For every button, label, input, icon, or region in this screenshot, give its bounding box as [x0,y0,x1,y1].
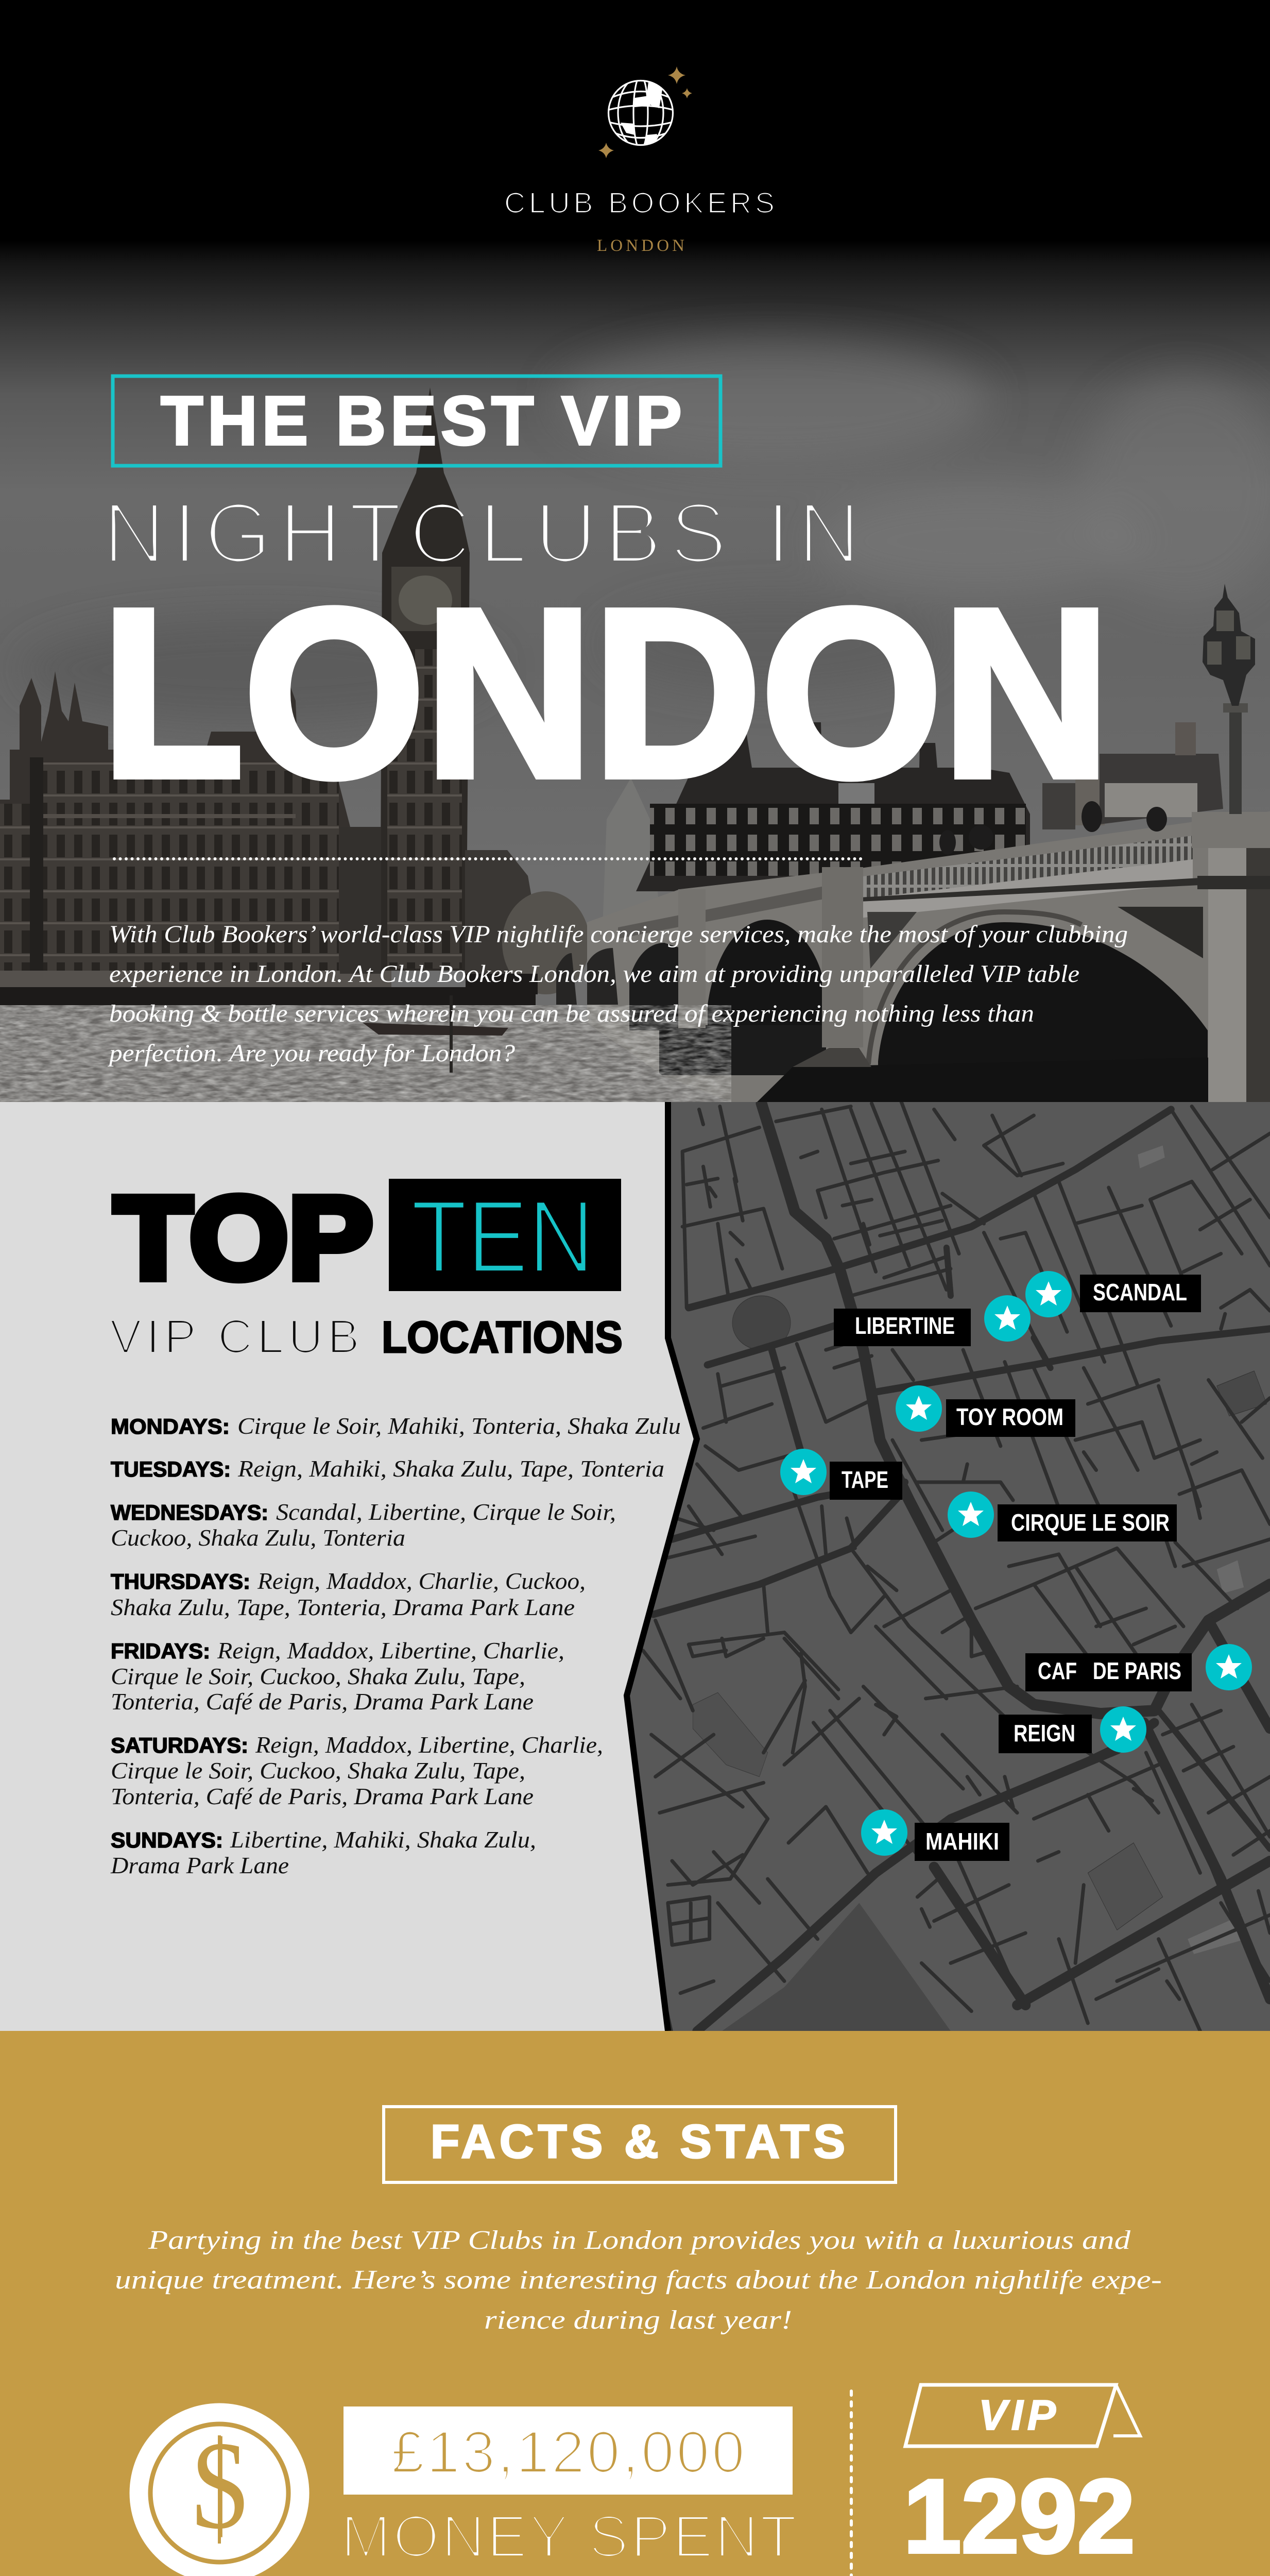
marker: Reign: REIGN [1014,1720,1075,1747]
schedule: Mondays: Cirque le Soir, Mahiki, Tonteria, Shaka Zulu [237,1413,681,1439]
schedule: Wednesdays [111,1499,616,1551]
schedule: Thursdays [111,1568,586,1620]
schedule: Thursdays: THURSDAYS: [111,1569,250,1594]
brand city: LONDON [597,236,684,255]
heading: TEN box: TEN [411,1179,594,1294]
schedule: Fridays: Reign, Maddox, Libertine, Charlie, [217,1637,564,1664]
intro paragraph: Partying in the best VIP Clubs in London provides you with a luxurious and [148,2226,1131,2255]
photo: Houses of Parliament [0,670,536,1006]
schedule: Fridays: Cirque le Soir, Cuckoo, Shaka Zulu, Tape, [111,1663,525,1689]
schedule: Saturdays: Cirque le Soir, Cuckoo, Shaka Zulu, Tape, [111,1757,525,1784]
panel: facts and stats [0,2031,1270,2576]
sky background [0,0,1270,1102]
intro paragraph: experience in London. At Club Bookers London, we aim at providing unparalleled VIP table [109,960,1079,988]
schedule: Saturdays [111,1732,603,1809]
panel: hero photo header [0,0,1270,1102]
marker: Reign [999,1706,1146,1753]
subheading: VIP club: VIP CLUB [110,1310,359,1363]
schedule: Tuesdays: TUESDAYS: [111,1457,231,1481]
schedule: Sundays: SUNDAYS: [111,1828,223,1852]
schedule: Wednesdays: Scandal, Libertine, Cirque le Soir, [276,1499,616,1525]
clouds [21,340,1270,721]
marker: Cafe de Paris [1025,1644,1252,1691]
intro paragraph: unique treatment. Here’s some interesting facts about the London nightlife expe- [115,2265,1162,2295]
map of central London [618,1100,1270,2035]
heading: nightclubs in: NIGHTCLUBS IN [103,485,860,581]
icon: gold sparkles [598,66,692,158]
teal frame [113,376,720,466]
marker: Tape [780,1449,902,1500]
marker: Toy Room [896,1385,1075,1437]
schedule: Saturdays: SATURDAYS: [111,1733,248,1757]
marker: Mahiki: MAHIKI [925,1828,999,1855]
heading text: THE BEST VIP [161,382,682,460]
schedule: Thursdays: Shaka Zulu, Tape, Tonteria, Drama Park Lane [111,1594,575,1620]
photo: bridge piers [678,812,1270,1102]
schedule: Thursdays: Reign, Maddox, Charlie, Cuckoo, [257,1568,586,1594]
photo: distant buildings right [1042,722,1223,829]
panel: top ten locations [0,1100,1270,2035]
heading: TOP: TOP [114,1173,373,1303]
photo: Portcullis House [636,722,1030,891]
thin streets [682,1100,1270,1386]
photo: bridge arches [556,912,1270,1102]
heading: facts and stats: FACTS & STATS [431,2115,845,2168]
park areas [693,1145,1267,2031]
photo: low buildings and trees by the river [340,778,659,994]
photo: lamp post [1203,584,1255,814]
schedule: Fridays: FRIDAYS: [111,1639,210,1663]
intro paragraph [108,921,1128,1067]
heading: London: LONDON [101,559,1110,827]
icon: VIP table tent: VIP [979,2391,1056,2439]
panel background [0,2031,1270,2576]
stat: money spent label: MONEY SPENT [341,2503,797,2570]
marker: Scandal: SCANDAL [1093,1279,1187,1306]
panel background [0,1102,1270,2031]
schedule: Wednesdays: WEDNESDAYS: [111,1500,268,1524]
subheading: locations: LOCATIONS [382,1313,623,1362]
stat: money spent value: £13,120,000 [391,2419,745,2485]
intro paragraph: With Club Bookers’ world-class VIP nightlife concierge services, make the most of your clubbing [109,921,1128,948]
icon: disco ball [608,79,674,146]
brand name: CLUB BOOKERS [504,187,775,219]
intro paragraph: perfection. Are you ready for London? [108,1040,515,1067]
marker: Libertine [834,1295,1031,1346]
intro paragraph [115,2226,1162,2335]
photo: Big Ben tower [380,387,470,971]
photo: people on the bridge [939,801,1167,855]
main roads [762,1104,1270,1714]
schedule: Fridays: Tonteria, Café de Paris, Drama Park Lane [111,1688,534,1715]
schedule: Wednesdays: Cuckoo, Shaka Zulu, Tonteria [111,1524,405,1551]
schedule: Sundays: Libertine, Mahiki, Shaka Zulu, [230,1826,536,1853]
intro paragraph: rience during last year! [484,2306,792,2335]
schedule: Fridays [111,1637,564,1715]
dotted divider [114,857,861,860]
schedule: Saturdays: Reign, Maddox, Libertine, Charlie, [255,1732,603,1758]
marker: Scandal [1025,1271,1201,1317]
schedule: Saturdays: Tonteria, Café de Paris, Drama Park Lane [111,1783,534,1809]
marker: Libertine: LIBERTINE [855,1312,955,1339]
heading: facts and stats [384,2107,896,2182]
marker: Cirque le Soir [948,1492,1177,1541]
photo: River Thames [0,995,731,1102]
marker: Mahiki [861,1809,1009,1861]
schedule: Mondays: MONDAYS: [111,1414,230,1438]
icon: VIP table tent [905,2385,1140,2446]
dotted divider vertical [850,2391,853,2576]
marker: Cirque le Soir: CIRQUE LE SOIR [1011,1509,1170,1536]
schedule: Tuesdays: Reign, Mahiki, Shaka Zulu, Tape, Tonteria [237,1455,664,1482]
schedule: Sundays: Drama Park Lane [110,1852,289,1878]
stat: tables count: 1292 [903,2458,1135,2575]
photo: bridge wall [587,811,1270,1102]
marker: Tape: TAPE [842,1466,888,1493]
marker: Cafe de Paris: CAF DE PARIS [1038,1657,1181,1684]
stat: money spent value [344,2406,793,2495]
map edge [627,1102,697,2031]
icon: dollar coin [130,2403,309,2576]
schedule: Sundays [110,1826,536,1878]
icon: dollar coin: $ [192,2415,247,2555]
logo: Club Bookers [504,66,775,255]
marker: Toy Room: TOY ROOM [956,1403,1063,1430]
intro paragraph: booking & bottle services wherein you can be assured of experiencing nothing less than [109,1000,1034,1027]
heading: the best VIP [113,376,720,466]
